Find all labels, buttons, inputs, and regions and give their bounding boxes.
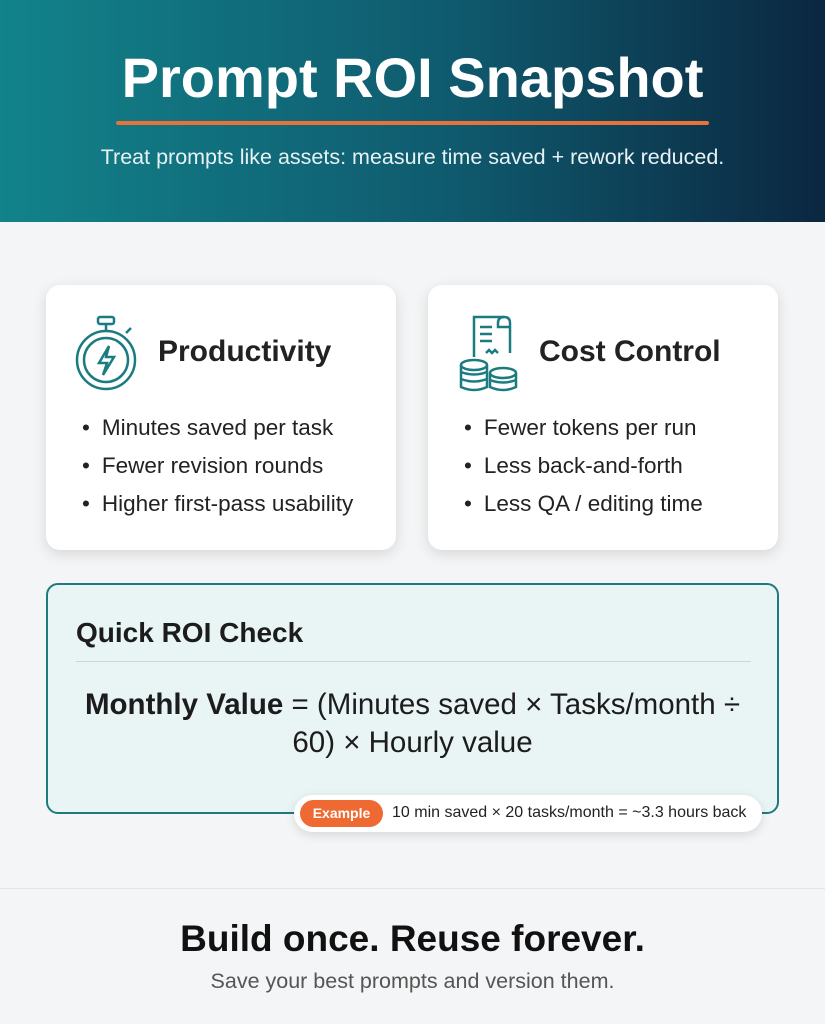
bullet list: Minutes saved per task (102, 415, 333, 440)
formula: 60) × Hourly value (292, 726, 533, 759)
panel: productivity (46, 285, 396, 550)
badge: Example (313, 805, 370, 821)
bullet list (82, 415, 354, 516)
bullet list (464, 415, 703, 516)
formula (85, 688, 740, 759)
bullet list: Less QA / editing time (484, 491, 703, 516)
badge (300, 800, 383, 827)
bullet list: Fewer tokens per run (484, 415, 696, 440)
panel: quick ROI check (46, 583, 779, 814)
footer heading: Build once. Reuse forever. (180, 918, 645, 959)
icon: stopwatch (76, 316, 136, 390)
subtitle: Treat prompts like assets: measure time saved + rework reduced. (101, 145, 724, 169)
callout: example (294, 795, 762, 832)
header band (0, 0, 825, 222)
title: Prompt ROI Snapshot (122, 46, 703, 109)
formula: Monthly Value = (Minutes saved × Tasks/month ÷ (85, 688, 740, 721)
bullet list: Fewer revision rounds (102, 453, 323, 478)
heading: Cost Control (539, 335, 721, 368)
footer subtitle: Save your best prompts and version them. (211, 969, 614, 993)
icon: receipt and coins (460, 316, 518, 392)
heading: Quick ROI Check (76, 617, 303, 648)
example text: 10 min saved × 20 tasks/month = ~3.3 hours back (392, 804, 746, 821)
title underline (116, 121, 709, 125)
bullet list: Less back-and-forth (484, 453, 683, 478)
panel: cost control (428, 285, 778, 550)
bullet list: Higher first-pass usability (102, 491, 353, 516)
heading: Productivity (158, 335, 331, 368)
